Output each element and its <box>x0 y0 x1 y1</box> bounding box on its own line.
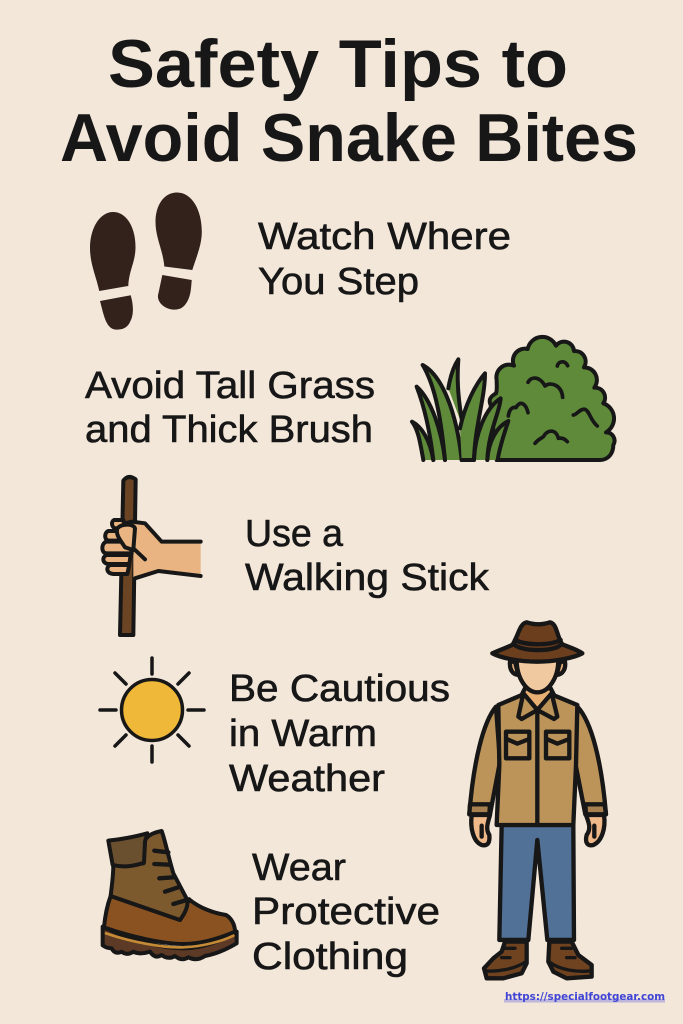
icon: hiking boot <box>103 831 237 959</box>
hand and forearm <box>117 522 201 578</box>
text: watch where you step: You Step <box>258 261 419 303</box>
text: avoid tall grass <box>85 365 375 451</box>
text: be cautious in warm weather <box>229 668 450 800</box>
website link: https://specialfootgear.com <box>505 990 665 1003</box>
text: be cautious in warm weather: in Warm <box>229 713 377 755</box>
boots <box>484 942 527 978</box>
collar <box>108 833 147 866</box>
upper <box>111 831 188 920</box>
hat <box>492 643 582 662</box>
text: be cautious in warm weather: Weather <box>229 758 385 800</box>
icon: hand gripping walking stick <box>102 477 201 635</box>
shirt body <box>497 694 577 825</box>
text: watch where you step: Watch Where <box>258 216 511 258</box>
laces <box>154 851 189 904</box>
text: use a walking stick <box>245 513 490 599</box>
collar <box>518 693 537 719</box>
title: Safety Tips to <box>108 26 568 102</box>
sole <box>103 927 237 959</box>
hands <box>471 815 490 845</box>
text: avoid tall grass: Avoid Tall Grass <box>85 365 375 407</box>
text: wear protective clothing: Protective <box>252 891 440 933</box>
sleeves <box>469 707 500 814</box>
stick <box>120 477 136 635</box>
icon: grass and bush <box>412 337 615 460</box>
lower leather <box>104 896 235 944</box>
illustration: hiker in protective clothing <box>469 622 606 978</box>
pants <box>499 825 574 940</box>
text: use a walking stick: Use a <box>245 513 344 555</box>
neck <box>522 688 554 713</box>
pockets <box>506 732 529 758</box>
ears <box>510 662 565 675</box>
text: use a walking stick: Walking Stick <box>245 557 490 599</box>
text: watch where you step <box>258 216 511 303</box>
text: be cautious in warm weather: Be Cautious <box>229 668 450 710</box>
text: wear protective clothing: Clothing <box>252 936 408 978</box>
title <box>60 26 638 176</box>
welt <box>106 933 233 947</box>
text: avoid tall grass: and Thick Brush <box>85 409 373 451</box>
face <box>517 660 558 692</box>
text: wear protective clothing <box>252 847 440 978</box>
icon: sun <box>100 658 204 762</box>
icon: footprints <box>90 192 202 330</box>
text: wear protective clothing: Wear <box>252 847 346 889</box>
title: Avoid Snake Bites <box>60 100 638 176</box>
